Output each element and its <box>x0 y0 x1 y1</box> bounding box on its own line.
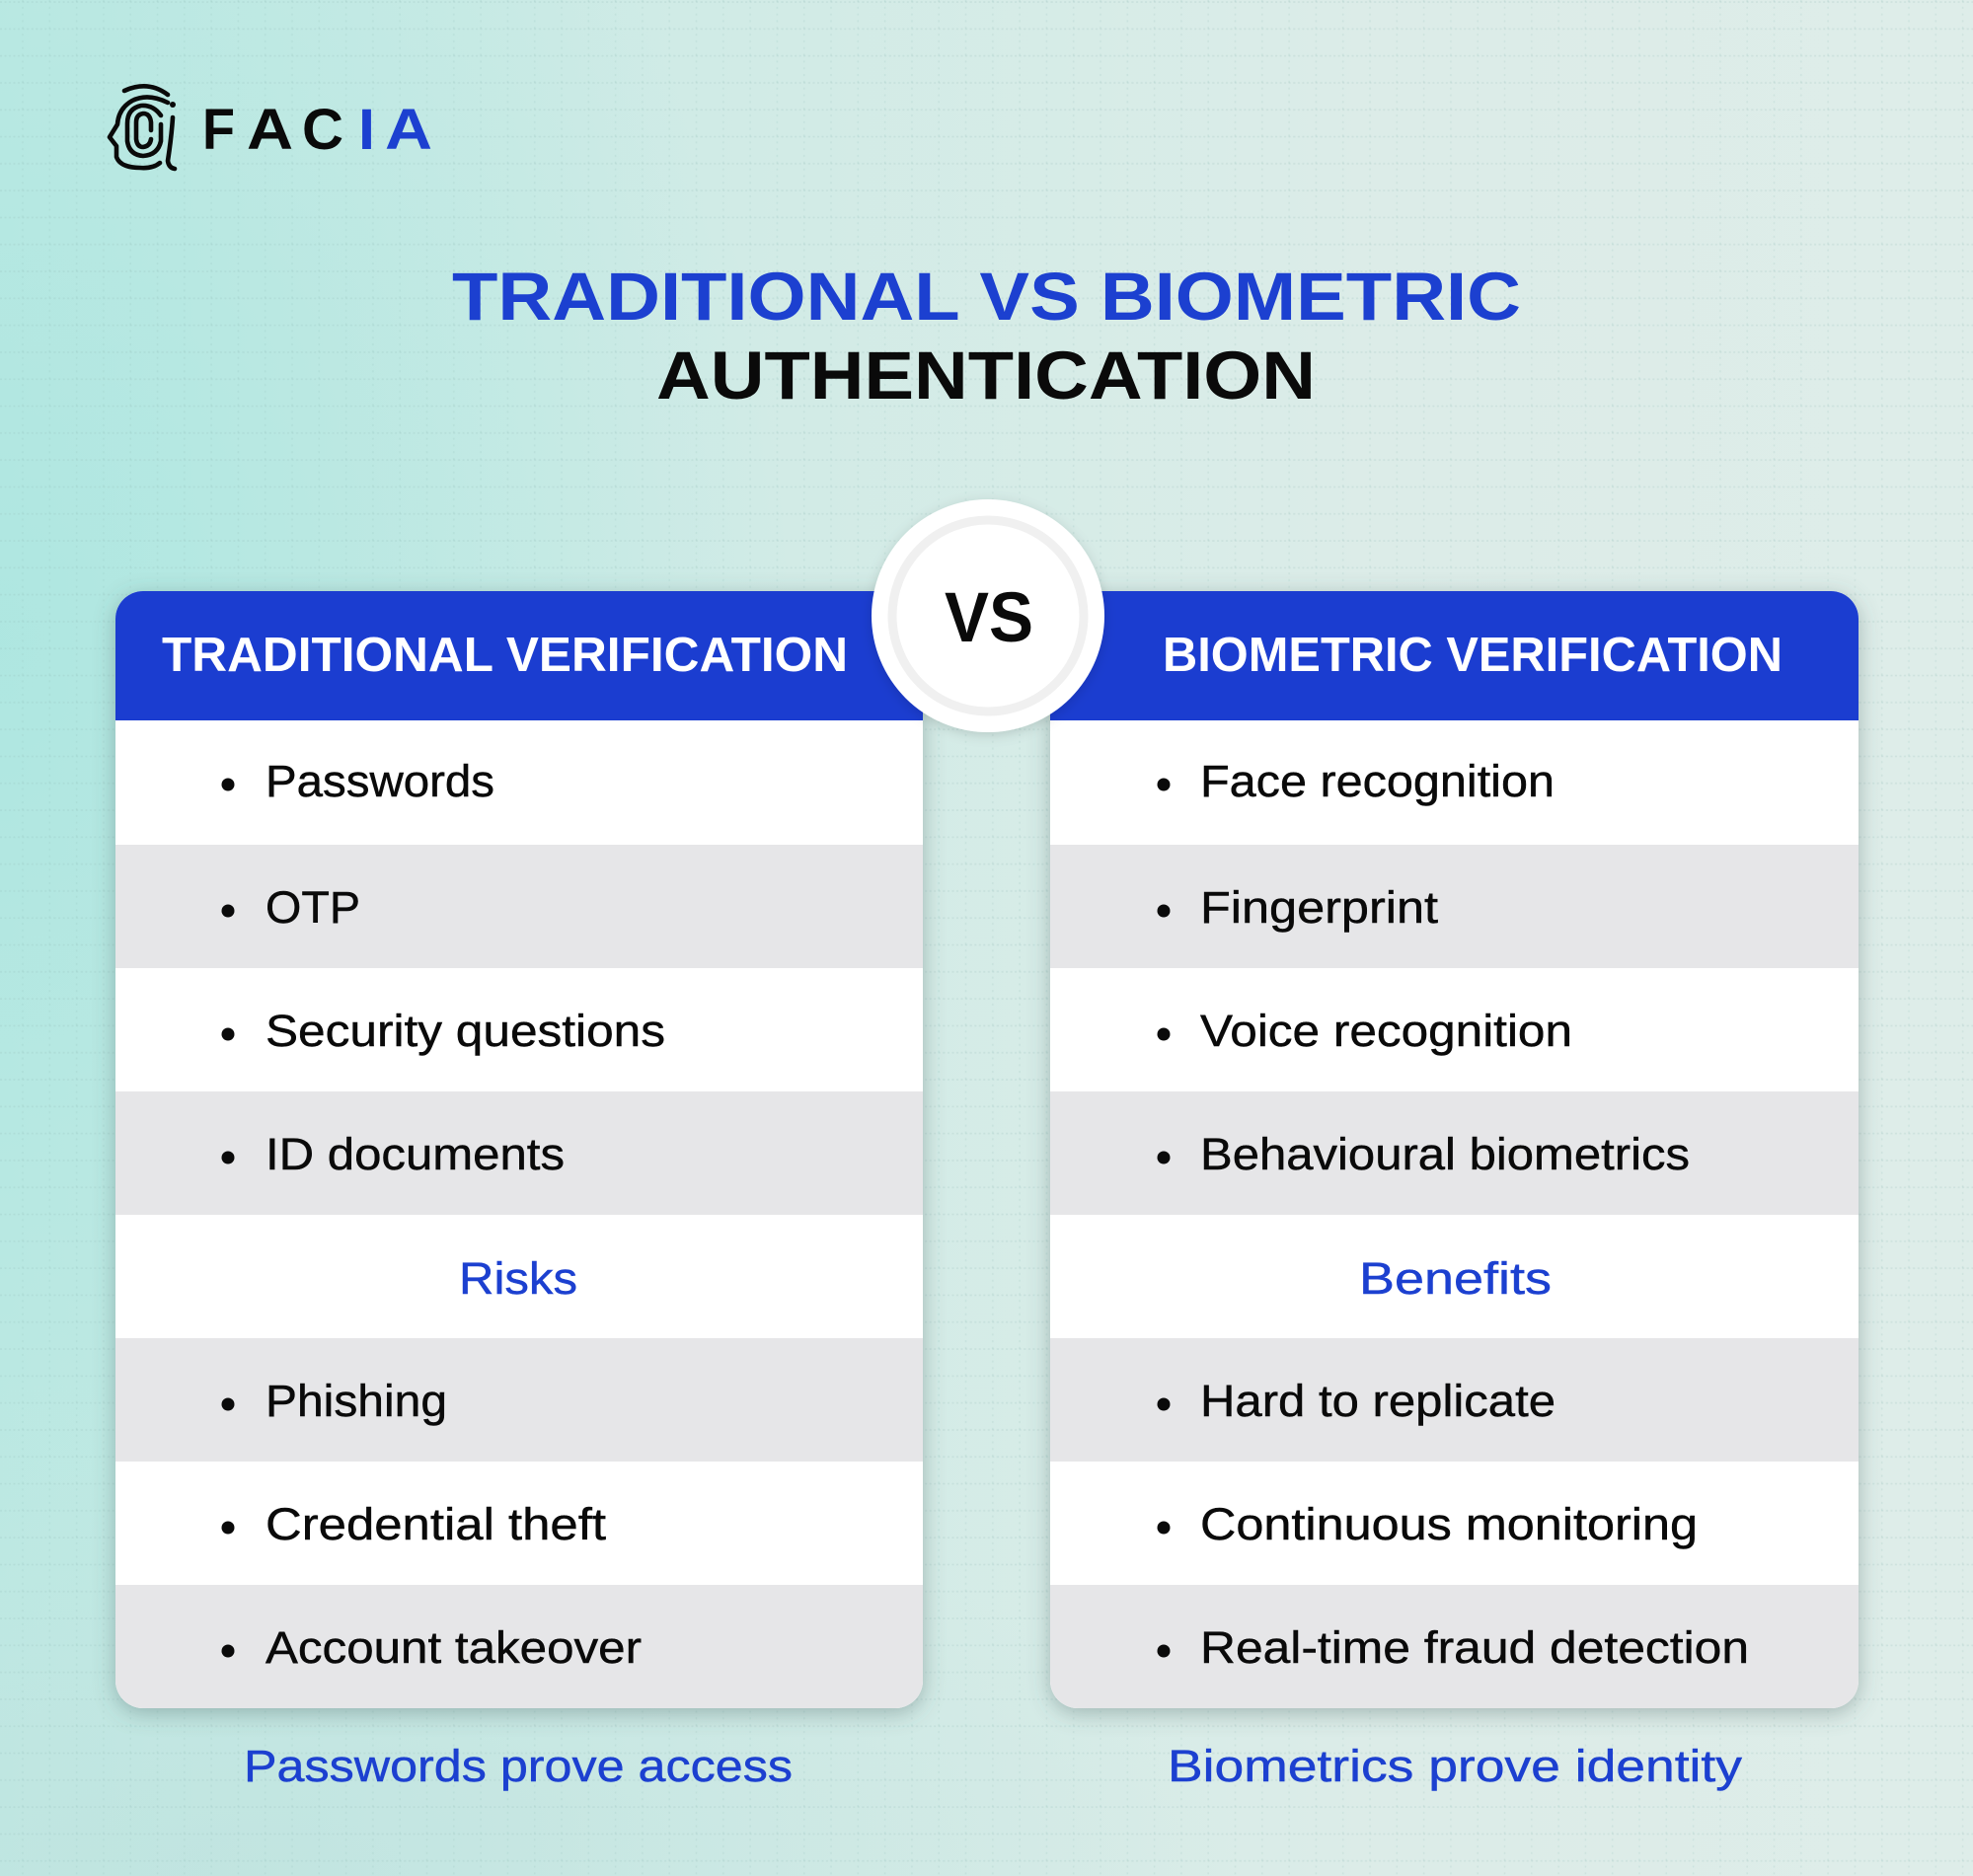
badge inner ring <box>892 520 1084 712</box>
panel header <box>1050 591 1859 720</box>
item: behavioural biometrics: Behavioural biometrics <box>1200 1129 1690 1179</box>
header label: BIOMETRIC VERIFICATION <box>1163 629 1783 682</box>
panel: traditional verification <box>115 591 923 1708</box>
title line 1: TRADITIONAL VS BIOMETRIC <box>452 259 1521 335</box>
logo wordmark: I <box>358 98 375 162</box>
item: OTP: OTP <box>266 882 360 933</box>
logo wordmark: A <box>247 98 293 162</box>
badge label: VS <box>945 579 1033 657</box>
panel shadow and base <box>1050 591 1859 1708</box>
item: credential theft: Credential theft <box>266 1499 607 1549</box>
logo wordmark: A <box>385 98 432 162</box>
icon: fingerprint head <box>110 86 176 169</box>
item: fingerprint: Fingerprint <box>1200 882 1439 933</box>
logo wordmark <box>202 98 432 162</box>
logo wordmark: F <box>202 98 235 162</box>
item: ID documents: ID documents <box>266 1129 565 1179</box>
item: behavioural biometrics <box>1050 1091 1859 1215</box>
item: OTP <box>115 845 923 968</box>
panel shadow and base <box>115 591 923 1708</box>
logo: FACIA <box>110 86 432 169</box>
caption: passwords prove access: Passwords prove access <box>244 1741 793 1791</box>
subheading: benefits: Benefits <box>1359 1253 1552 1304</box>
header label: TRADITIONAL VERIFICATION <box>162 629 848 682</box>
item: continuous monitoring: Continuous monitoring <box>1200 1499 1698 1549</box>
item: phishing <box>115 1338 923 1462</box>
caption: biometrics prove identity: Biometrics prove identity <box>1168 1741 1743 1791</box>
item: face recognition: Face recognition <box>1200 756 1555 806</box>
title line 2: AUTHENTICATION <box>656 338 1316 413</box>
panel: biometric verification <box>1050 591 1859 1708</box>
item: hard to replicate <box>1050 1338 1859 1462</box>
VS badge <box>872 499 1104 732</box>
item: ID documents <box>115 1091 923 1215</box>
subheading: risks: Risks <box>459 1253 577 1304</box>
item: fingerprint <box>1050 845 1859 968</box>
item: hard to replicate: Hard to replicate <box>1200 1376 1556 1426</box>
panel header <box>115 591 923 720</box>
item: passwords: Passwords <box>266 756 494 806</box>
title <box>452 259 1521 413</box>
item: phishing: Phishing <box>266 1376 447 1426</box>
logo wordmark: C <box>302 98 343 162</box>
item: account takeover: Account takeover <box>266 1622 642 1673</box>
item: voice recognition: Voice recognition <box>1200 1006 1572 1056</box>
item: real-time fraud detection <box>1050 1585 1859 1708</box>
item: real-time fraud detection: Real-time fraud detection <box>1200 1622 1749 1673</box>
item: security questions: Security questions <box>266 1006 665 1056</box>
badge outer circle <box>872 499 1104 732</box>
item: account takeover <box>115 1585 923 1708</box>
